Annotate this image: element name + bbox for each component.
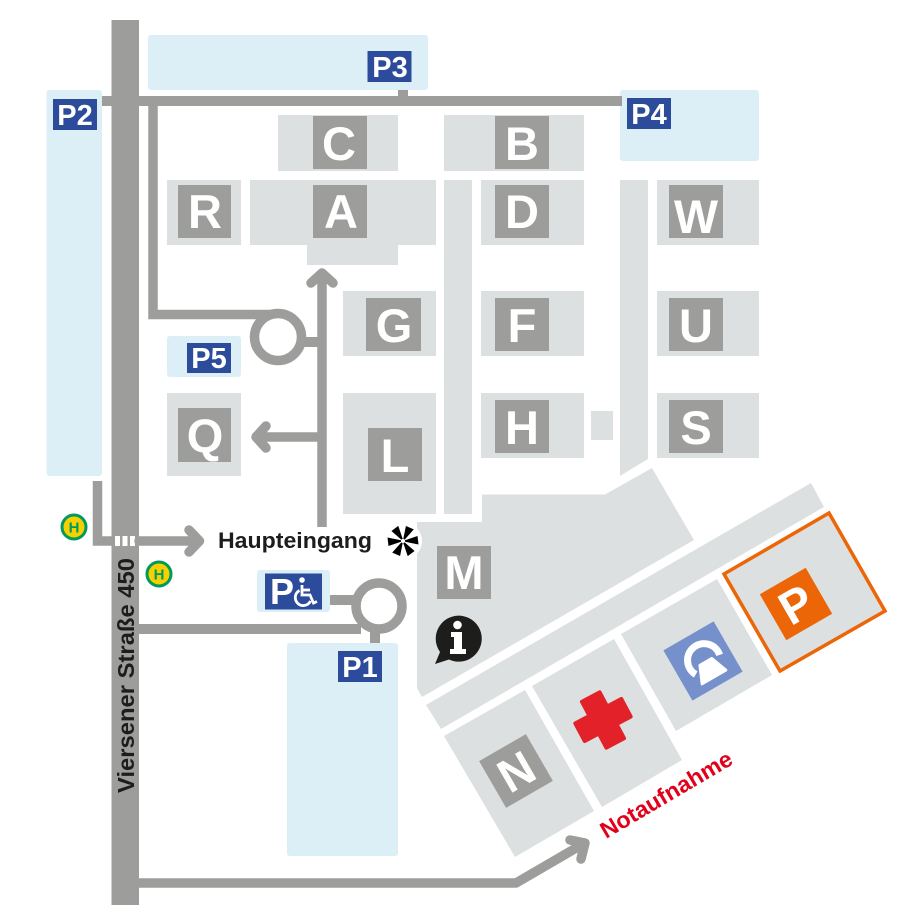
building L: L: [381, 429, 409, 482]
building N: N: [488, 740, 544, 803]
accessible parking sign: [257, 570, 330, 612]
building M: [417, 468, 694, 697]
emergency label: Notaufnahme: [595, 745, 737, 843]
building C: [278, 115, 398, 171]
building R: R: [188, 185, 222, 238]
bus stop icon east: H: [154, 566, 164, 584]
building U: U: [679, 299, 713, 352]
parking area P5: [167, 336, 241, 377]
parking area P3: P3: [372, 52, 408, 84]
icon: information: [435, 616, 482, 664]
road network: [98, 20, 622, 905]
parking area P4: P4: [631, 99, 667, 131]
building N: [444, 690, 594, 857]
arrow: to emergency department: [139, 840, 585, 883]
arrow: west to building Q: [256, 426, 318, 448]
parking area P3: [148, 35, 428, 90]
building W: [657, 180, 759, 245]
building D: D: [505, 185, 539, 238]
building W: W: [674, 190, 719, 243]
building F: F: [508, 299, 536, 352]
building S: [657, 393, 759, 458]
arrow: north to building A: [311, 273, 333, 527]
small block: [591, 411, 613, 440]
icon: hospital logo: [384, 522, 422, 560]
building R: [167, 180, 241, 245]
parking area P2: [46, 90, 102, 476]
accessible parking sign: P: [270, 571, 294, 612]
main entrance label: Haupteingang: [218, 528, 372, 553]
building F: [481, 291, 584, 356]
building G: G: [376, 299, 412, 352]
orange parking block: [724, 513, 885, 671]
arrow: to main entrance: [139, 530, 200, 552]
bus stop icon west: H: [69, 520, 79, 536]
street label: Viersener Straße 450: [113, 558, 139, 793]
corridor centre: [444, 180, 472, 514]
building B: [444, 115, 584, 171]
building A: [250, 180, 436, 265]
parking area P5: P5: [191, 343, 227, 375]
building B: B: [505, 117, 539, 170]
building D: [481, 180, 584, 245]
building S: S: [680, 401, 712, 454]
building H: H: [505, 401, 539, 454]
bus stop icon west: [62, 515, 86, 539]
emergency block with red cross: [532, 639, 682, 807]
bus stop icon east: [147, 562, 171, 586]
building C: C: [322, 117, 356, 170]
parking area P1: [287, 643, 398, 856]
building U: [657, 291, 759, 356]
building Q: [167, 393, 241, 476]
corridor east: [620, 180, 648, 476]
diagonal strip: [426, 483, 824, 729]
building Q: Q: [187, 409, 223, 462]
building G: [343, 291, 436, 356]
orange parking block: P: [769, 574, 823, 635]
parking area P1: P1: [342, 652, 378, 684]
building A: A: [324, 185, 358, 238]
parking area P4: [620, 90, 759, 161]
building M: M: [444, 546, 484, 599]
block with tunnel icon: [621, 579, 772, 731]
parking area P2: P2: [57, 100, 93, 132]
building H: [481, 393, 584, 458]
building L: [343, 393, 436, 514]
